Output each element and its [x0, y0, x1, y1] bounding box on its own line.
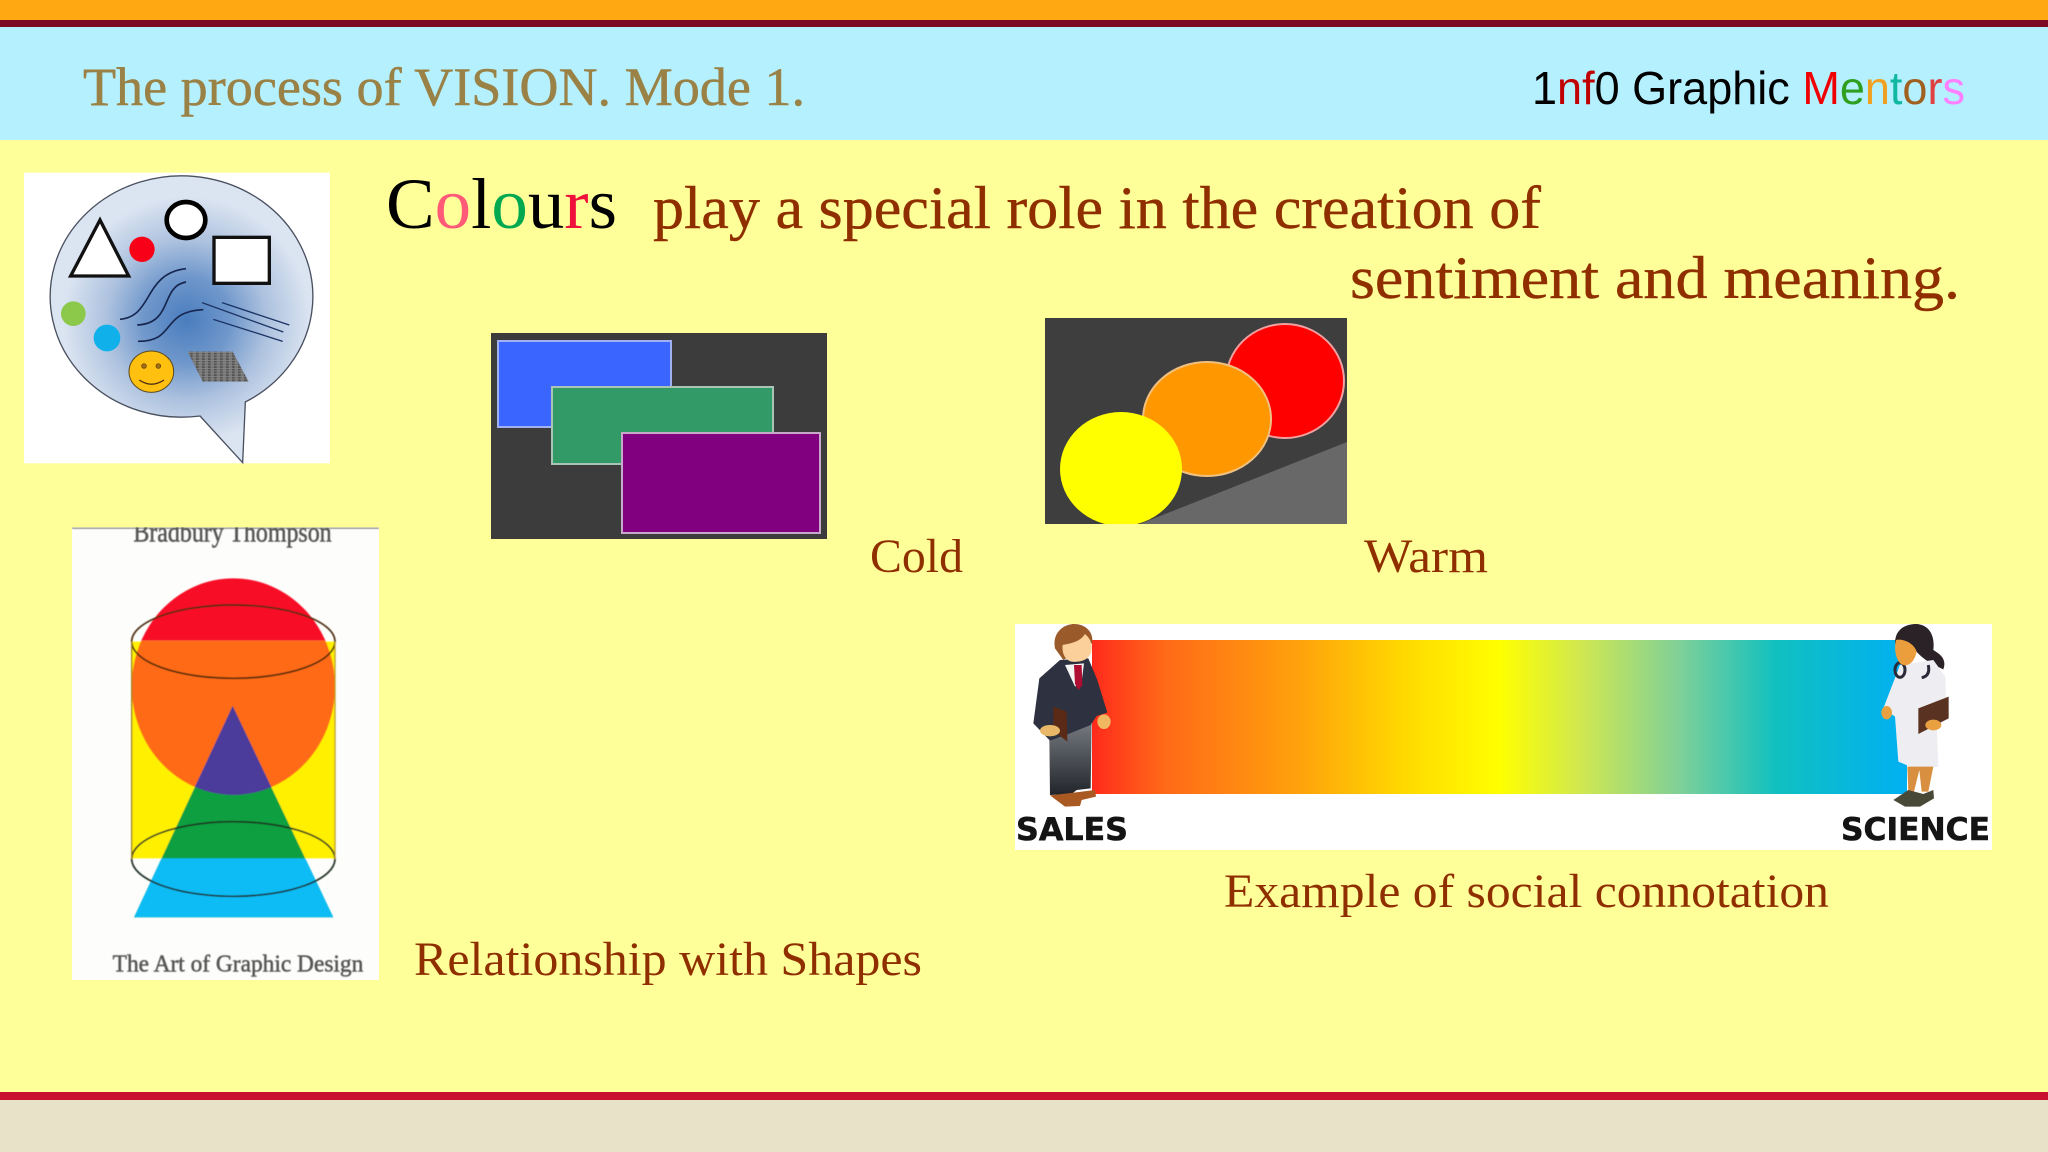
hatched parallelogram — [188, 352, 249, 382]
green dot — [61, 301, 86, 326]
orange circle — [1143, 362, 1271, 476]
yellow circle — [1060, 412, 1182, 526]
sentence line two: sentiment and meaning. — [1350, 245, 1960, 311]
stethoscope — [1895, 663, 1929, 678]
title: The process of VISION. Mode 1. — [83, 57, 805, 117]
folder — [1918, 697, 1949, 734]
legs — [1907, 767, 1933, 792]
label: cold: Cold — [870, 530, 963, 583]
purple rectangle — [622, 433, 820, 533]
straight lines — [202, 303, 289, 341]
cover author: Bradbury Thompson — [133, 517, 332, 548]
heading: colours: Colours — [386, 164, 617, 244]
shoes — [1050, 790, 1096, 807]
panel: sales to science spectrum — [1015, 624, 1992, 850]
footer band — [0, 1100, 2048, 1152]
shoes — [1893, 790, 1934, 807]
square — [214, 237, 269, 283]
bubble outline — [50, 176, 313, 463]
label: warm: Warm — [1364, 530, 1488, 583]
panel: warm colours — [1045, 318, 1347, 526]
face — [1895, 640, 1917, 665]
hair — [1895, 624, 1944, 669]
hand — [1925, 720, 1941, 730]
icon: science doctor — [1881, 624, 1949, 807]
icon: sales man — [1033, 624, 1111, 807]
caption: social connotation: Example of social connotation — [1224, 865, 1829, 918]
footer rule — [0, 1092, 2048, 1100]
wavy lines — [120, 269, 203, 341]
tie — [1074, 665, 1082, 690]
label: sales: SALES — [1016, 812, 1128, 848]
label: science: SCIENCE — [1841, 812, 1990, 848]
red circle — [1226, 324, 1344, 438]
brand: 1nf0 Graphic Mentors — [1532, 62, 1965, 114]
blue dot — [94, 325, 120, 351]
green rectangle — [552, 387, 773, 464]
shirt — [1065, 663, 1084, 687]
jacket — [1033, 658, 1107, 741]
label: relationship with shapes: Relationship with Shapes — [414, 933, 922, 986]
ring — [167, 202, 205, 238]
header band — [0, 27, 2048, 140]
hair — [1054, 624, 1092, 660]
legs — [1049, 722, 1092, 795]
grey wedge — [1140, 442, 1347, 524]
panel: book cover — [72, 517, 379, 980]
folder — [1053, 707, 1067, 742]
icon: speech bubble with shapes — [24, 173, 330, 463]
blue rectangle — [498, 341, 671, 427]
smiley — [129, 351, 174, 392]
red dot — [129, 237, 155, 262]
triangle — [71, 220, 129, 276]
heading: colours — [386, 164, 1960, 311]
cover top shadow — [72, 527, 379, 529]
cover title: The Art of Graphic Design — [113, 952, 363, 978]
hands — [1040, 725, 1060, 736]
coat — [1883, 660, 1947, 769]
top orange band — [0, 0, 2048, 20]
cover shapes — [130, 578, 337, 918]
panel: cold colours — [491, 333, 827, 539]
face — [1062, 634, 1092, 662]
sentence line one: play a special role in the creation of — [653, 175, 1541, 241]
dark red rule — [0, 20, 2048, 27]
gradient bar — [1092, 640, 1907, 794]
